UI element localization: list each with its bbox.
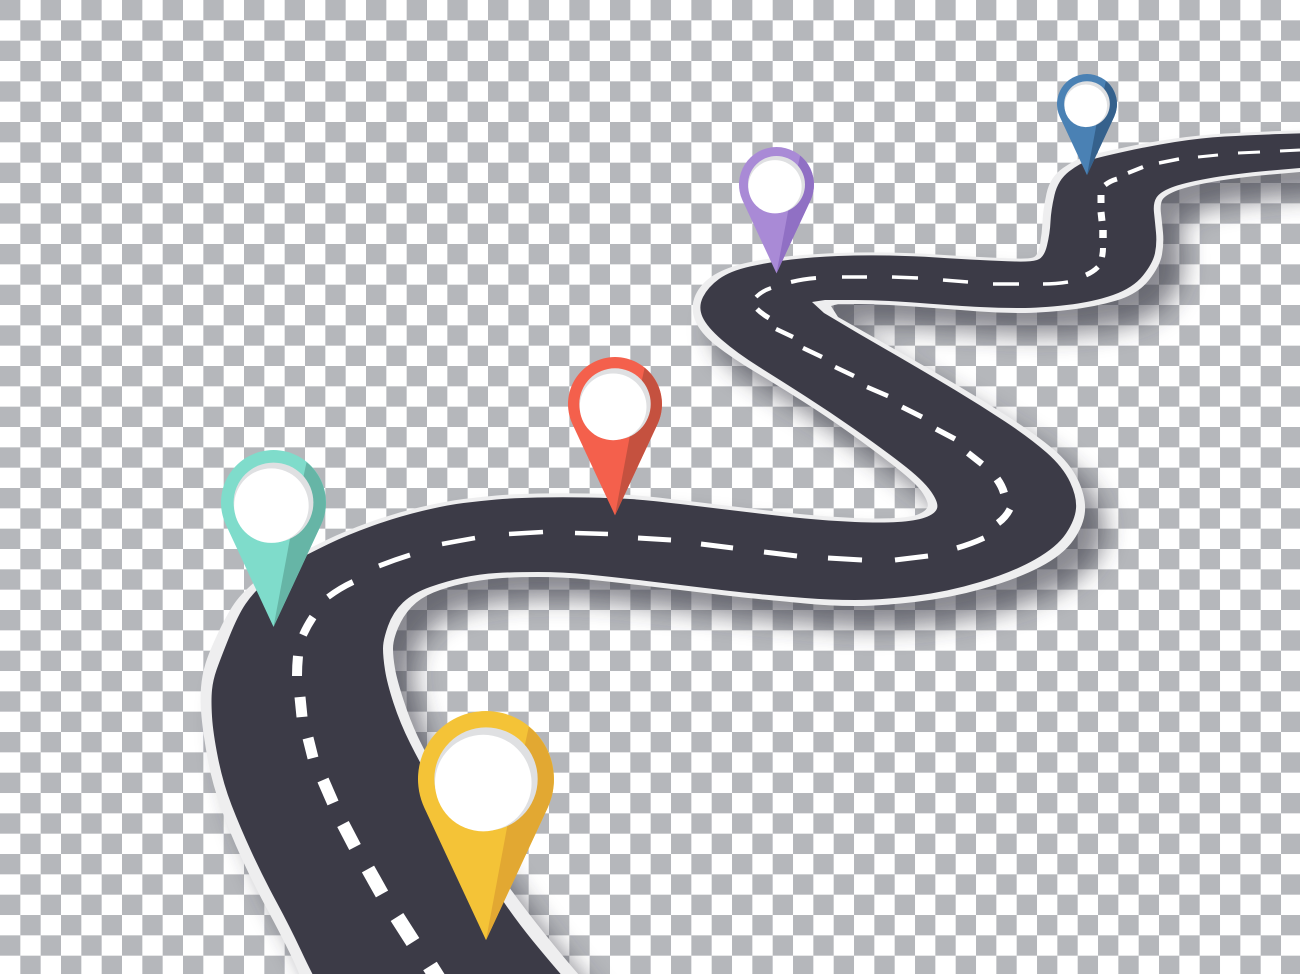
road asphalt surface	[212, 132, 1300, 974]
pin: red	[568, 357, 662, 515]
pin: purple	[739, 147, 814, 273]
pin: teal	[221, 450, 326, 627]
road white edge band	[201, 129, 1300, 974]
road drop shadow	[221, 151, 1300, 974]
road centre dashed line	[297, 150, 1300, 974]
road	[201, 129, 1300, 974]
pin: blue	[1057, 74, 1117, 175]
pin: yellow	[418, 711, 554, 940]
